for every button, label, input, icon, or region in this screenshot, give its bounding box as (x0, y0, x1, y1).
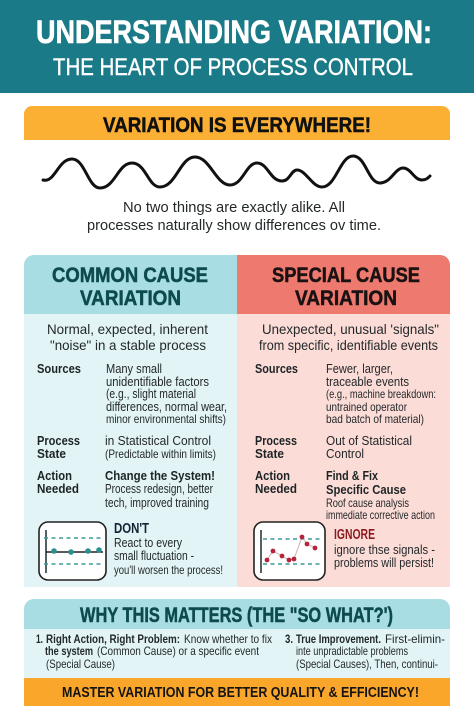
wave line (43, 156, 430, 188)
action needed row: Specific Cause (326, 482, 406, 497)
special cause description: from specific, identifiable events (259, 337, 438, 353)
process state row: Out of Statistical (326, 433, 412, 448)
common cause description (47, 321, 208, 353)
action needed row: Find & Fix (326, 468, 379, 483)
don't callout (114, 521, 223, 577)
action needed row: Action (37, 468, 72, 483)
why this matters heading: WHY THIS MATTERS (THE "SO WHAT?') (80, 604, 393, 627)
sources row: unidentifiable factors (106, 374, 209, 389)
footer banner: MASTER VARIATION FOR BETTER QUALITY & EFFICIENCY! (62, 685, 419, 701)
process state row: State (255, 446, 284, 461)
orange heading bar: VARIATION IS EVERYWHERE! (103, 114, 371, 137)
process state row: in Statistical Control (105, 433, 211, 448)
subtitle: THE HEART OF PROCESS CONTROL (53, 54, 413, 81)
process state row: Process (255, 433, 297, 448)
special cause heading: VARIATION (295, 287, 397, 310)
point 1: 1. (36, 632, 43, 646)
process state row: Control (326, 446, 364, 461)
sources row: (e.g., machine breakdown: (326, 387, 436, 401)
intro text (87, 200, 381, 234)
section: variation is everywhere (24, 106, 450, 234)
panel: special cause (237, 255, 450, 587)
process state row: (Predictable within limits) (105, 447, 216, 461)
orange heading bar (24, 106, 450, 140)
intro text: processes naturally show differences ov time. (87, 218, 381, 234)
point 3: inte unpradictable problems (296, 644, 408, 658)
action needed row: Action (255, 468, 290, 483)
action needed row: tech, improved training (105, 495, 209, 510)
common cause heading (24, 255, 237, 314)
sources row: Sources (255, 361, 298, 376)
action needed row: Roof cause analysis (326, 496, 409, 510)
point 3: First-elimin- (385, 632, 445, 646)
point 1 (36, 632, 272, 671)
process state row: Process (37, 433, 80, 448)
intro text: No two things are exactly alike. All (123, 200, 345, 216)
sources row: differences, normal wear, (106, 399, 227, 414)
action needed row: Needed (255, 481, 297, 496)
don't callout: small fluctuation - (114, 548, 194, 563)
sources row: (e.g., slight material (106, 386, 196, 401)
action needed row: Process redesign, better (105, 481, 214, 496)
sources row: traceable events (326, 374, 409, 389)
panel: common cause (24, 255, 237, 587)
point 1: (Common Cause) or a specific event (97, 644, 260, 658)
ignore callout (334, 527, 435, 570)
special cause heading (237, 255, 450, 314)
footer banner (24, 678, 450, 706)
action needed row (255, 468, 435, 522)
common cause description: "noise" in a stable process (50, 337, 206, 353)
point 1: (Special Cause) (46, 657, 115, 671)
point 3 (285, 632, 445, 671)
don't callout: DON'T (114, 521, 149, 537)
point 1: Know whether to fix (184, 632, 272, 646)
common cause description: Normal, expected, inherent (47, 321, 208, 337)
don't callout: React to every (114, 535, 182, 550)
process state row (255, 433, 412, 461)
special cause description (259, 321, 439, 353)
header banner (0, 0, 474, 93)
ignore callout: problems will persist! (334, 555, 434, 570)
point 1: the system (45, 644, 93, 658)
sources row: Many small (106, 361, 162, 376)
sources row: untrained operator (326, 400, 407, 414)
why this matters heading (24, 599, 450, 629)
panel: why this matters (24, 599, 450, 680)
sources row: Fewer, larger, (326, 361, 393, 376)
point 3: 3. (285, 632, 293, 646)
action needed row (37, 468, 215, 510)
ignore callout: ignore thse signals - (334, 542, 435, 557)
common cause heading: COMMON CAUSE (52, 264, 208, 287)
don't callout: you'll worsen the process! (114, 563, 223, 577)
action needed row: immediate corrective action (326, 508, 435, 522)
icon: out of control chart (254, 522, 325, 580)
point 3: (Special Causes), Then, continui- (296, 657, 438, 671)
sources row (255, 361, 436, 426)
sources row: minor environmental shifts) (106, 412, 226, 426)
point 1: Right Action, Right Problem: (46, 632, 180, 646)
process state row (37, 433, 216, 461)
action needed row: Needed (37, 481, 79, 496)
sources row: Sources (37, 361, 81, 376)
common cause heading: VARIATION (80, 287, 181, 310)
action needed row: Change the System! (105, 468, 215, 483)
sources row (37, 361, 227, 426)
process state row: State (37, 446, 66, 461)
sources row: bad batch of material) (326, 412, 424, 426)
special cause description: Unexpected, unusual 'signals" (262, 321, 439, 337)
icon: stable control chart (39, 522, 106, 580)
ignore callout: IGNORE (334, 527, 375, 543)
point 3: True Improvement. (296, 632, 381, 646)
special cause heading: SPECIAL CAUSE (272, 264, 420, 287)
